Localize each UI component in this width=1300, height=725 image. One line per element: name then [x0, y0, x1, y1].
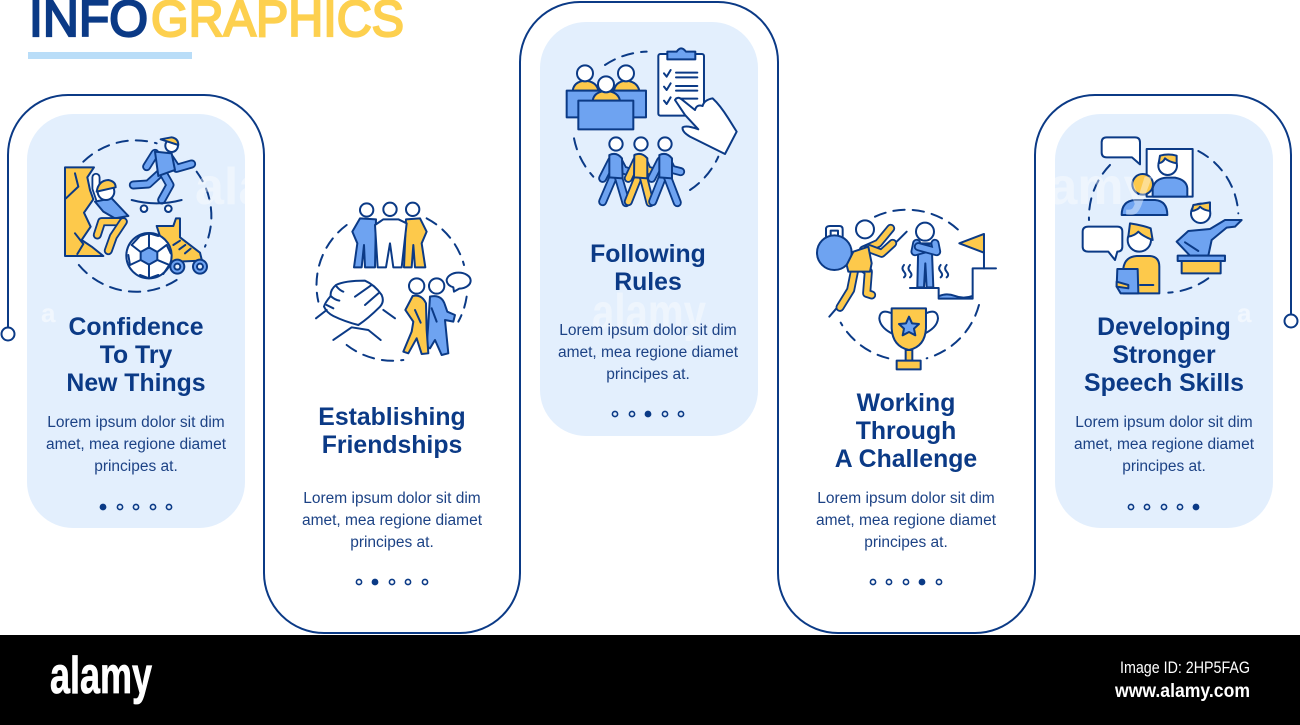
heading: Rules	[614, 269, 682, 296]
footer bar	[0, 635, 1300, 725]
heading: Confidence	[68, 314, 204, 341]
icon: speakers, screen and speech bubbles	[1083, 137, 1242, 293]
body text: Lorem ipsum dolor sit dim	[817, 490, 995, 507]
heading: Stronger	[1112, 342, 1216, 369]
outline end node	[1284, 314, 1298, 328]
panel: friendships	[302, 203, 483, 585]
body text: amet, mea regione diamet	[1074, 436, 1255, 453]
watermark fragment: alamy	[1005, 158, 1153, 216]
heading: Friendships	[322, 432, 462, 459]
outline start node	[2, 328, 14, 340]
heading: Working	[857, 390, 955, 417]
watermark fragment: a	[1237, 298, 1252, 328]
title	[29, 0, 404, 47]
watermark fragment: alamy	[592, 284, 706, 342]
pagination dots	[870, 579, 942, 585]
panel: speech skills	[1005, 114, 1273, 528]
pagination dots	[100, 504, 172, 510]
body text: principes at.	[864, 534, 948, 551]
heading: Following	[590, 241, 706, 268]
icon: kettlebell, standing person, flag and trophy	[817, 210, 996, 369]
watermark fragment: alam	[195, 158, 314, 216]
title underline	[28, 52, 192, 59]
icon: friends, handshake and walking pair	[316, 203, 471, 361]
heading: Developing	[1097, 314, 1231, 341]
body text: Lorem ipsum dolor sit dim	[47, 414, 225, 431]
body text: amet, mea regione diamet	[46, 436, 227, 453]
body text: principes at.	[1122, 458, 1206, 475]
body text: principes at.	[94, 458, 178, 475]
heading: To Try	[100, 342, 172, 369]
icon: committee, checklist and walking group	[567, 48, 737, 203]
pagination dots	[1128, 504, 1199, 510]
body text: amet, mea regione diamet	[302, 512, 483, 529]
body text: Lorem ipsum dolor sit dim	[559, 322, 737, 339]
watermark fragment: a	[41, 298, 56, 328]
heading: New Things	[66, 370, 206, 397]
body text: principes at.	[350, 534, 434, 551]
heading: Establishing	[318, 404, 466, 431]
body text: amet, mea regione diamet	[558, 344, 739, 361]
watermark fragment	[1005, 158, 1252, 328]
body text: principes at.	[606, 366, 690, 383]
panel: confidence	[27, 114, 314, 528]
icon: climber, skater, ball and roller skate	[65, 137, 211, 292]
heading: A Challenge	[835, 446, 977, 473]
pagination dots	[612, 411, 684, 417]
website: www.alamy.com	[1114, 681, 1250, 702]
heading: Speech Skills	[1084, 370, 1244, 397]
pagination dots	[356, 579, 428, 585]
body text: Lorem ipsum dolor sit dim	[303, 490, 481, 507]
heading: Through	[856, 418, 956, 445]
image id: Image ID: 2HP5FAG	[1120, 658, 1250, 677]
body text: amet, mea regione diamet	[816, 512, 997, 529]
watermark fragment	[41, 158, 314, 328]
panel: challenge	[816, 210, 997, 585]
body text: Lorem ipsum dolor sit dim	[1075, 414, 1253, 431]
alamy logo: alamy	[50, 647, 152, 705]
panel: rules	[540, 22, 758, 436]
